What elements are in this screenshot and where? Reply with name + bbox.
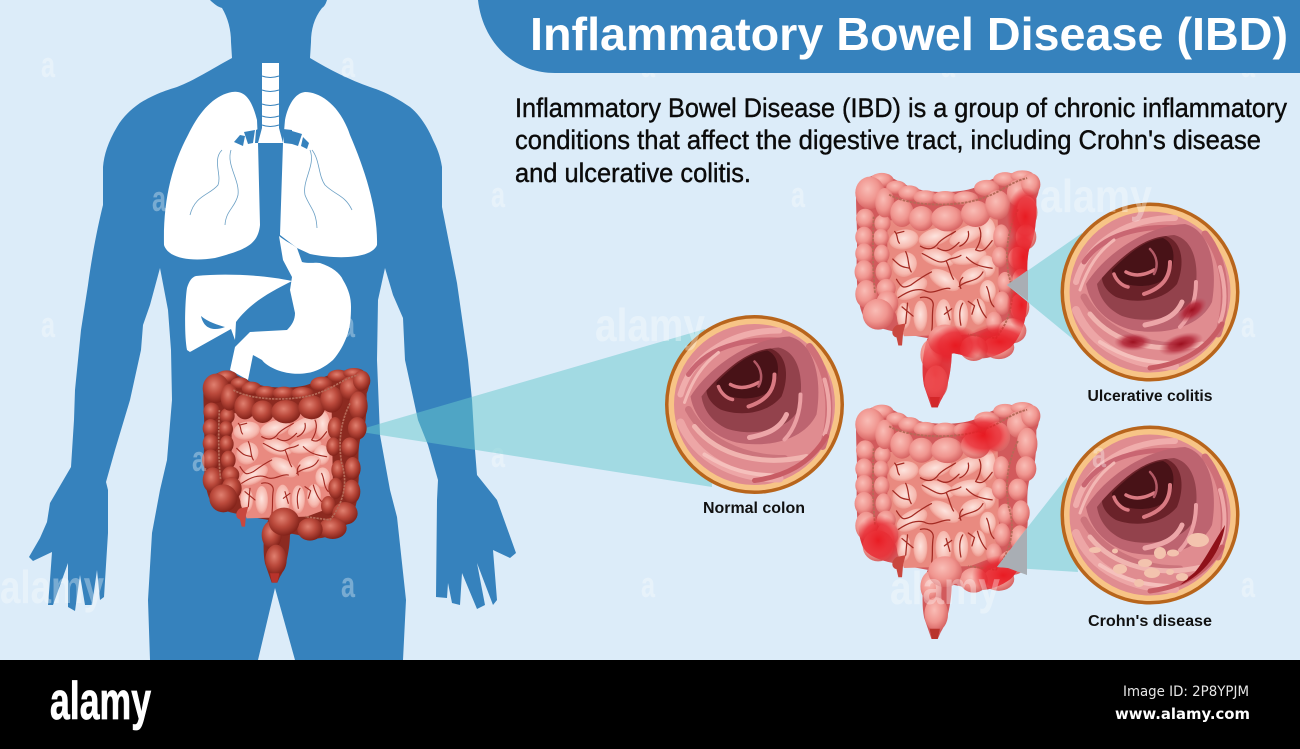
alamy watermarks: alamy (890, 562, 1000, 614)
alamy watermarks: alamy (0, 561, 104, 613)
body silhouette (29, 0, 516, 660)
alamy watermarks: a (341, 44, 356, 85)
label: normal colon: Normal colon (703, 500, 805, 517)
alamy logo: alamy (50, 672, 151, 731)
icon: liver (185, 275, 292, 352)
icon: normal colon cross section (665, 315, 844, 494)
watermark letters behind artwork (41, 44, 1256, 605)
alamy watermarks: a (1092, 434, 1107, 475)
image id: Image ID: 2P8YPJM (1123, 684, 1249, 700)
footer bar (0, 660, 1300, 749)
alamy watermarks: alamy (595, 299, 705, 351)
panel: crohn's disease (854, 402, 1240, 639)
description text (515, 93, 1288, 188)
colon in body (202, 368, 370, 583)
colon with crohn's disease (854, 402, 1040, 639)
panel: ulcerative colitis (855, 170, 1240, 419)
alamy watermarks: alamy (1040, 170, 1152, 222)
description text: and ulcerative colitis. (515, 158, 751, 188)
beam: normal colon to body (355, 329, 712, 487)
icon: stomach (230, 236, 351, 380)
description text: conditions that affect the digestive tract, including Crohn's disease (515, 125, 1261, 155)
alamy watermarks: a (192, 438, 207, 479)
alamy watermarks: a (152, 178, 167, 219)
label: ulcerative colitis: Ulcerative colitis (1088, 388, 1212, 405)
title banner (478, 0, 1300, 73)
beam: crohn's disease (997, 477, 1078, 575)
alamy watermarks (0, 44, 1152, 614)
website: www.alamy.com (1115, 705, 1250, 723)
beam: ulcerative colitis (1007, 233, 1082, 345)
icon: lungs and trachea (164, 63, 377, 259)
label: crohn's disease: Crohn's disease (1088, 613, 1212, 630)
alamy watermarks: a (341, 564, 356, 605)
alamy watermarks: a (341, 304, 356, 345)
title: Inflammatory Bowel Disease (IBD) (530, 8, 1288, 60)
panel: normal colon (665, 315, 844, 517)
icon: ulcerative colitis cross section (1060, 202, 1240, 382)
colon with ulcerative colitis (855, 170, 1044, 419)
icon: crohn's cross section (1060, 426, 1240, 604)
